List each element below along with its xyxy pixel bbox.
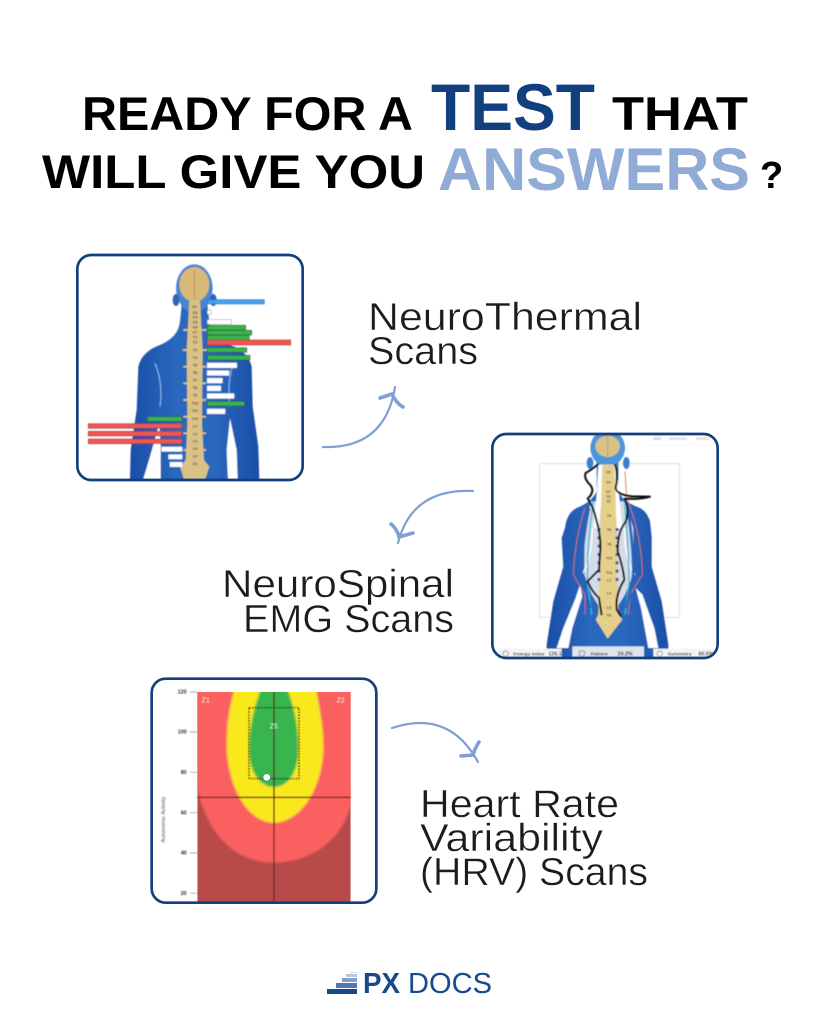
vertebra labels: T9	[193, 394, 197, 398]
vertebra labels: S1	[607, 613, 611, 617]
vertebra labels: L3	[607, 592, 611, 596]
vertebra labels: C7	[193, 330, 197, 334]
legend: Severe	[696, 436, 710, 441]
vertebra labels: T6	[607, 528, 611, 532]
HRV label: (HRV) Scans	[420, 851, 648, 894]
y axis: 120	[178, 690, 187, 696]
vertebra labels: T11	[192, 409, 198, 413]
arrow: to NeuroSpinal	[391, 491, 473, 543]
vertebra labels	[606, 471, 612, 617]
stats bar: Energy Index	[513, 651, 545, 657]
target zone	[249, 708, 299, 779]
y axis: Autonomic Activity	[161, 797, 167, 843]
white gaps beside the torso	[557, 585, 582, 648]
logo: DOCS	[408, 968, 492, 1000]
NeuroThermal label	[368, 296, 642, 373]
y axis: 80	[181, 770, 187, 776]
vertebra labels: C7	[606, 490, 611, 494]
vertebra labels: L1	[193, 424, 197, 428]
y axis: 20	[181, 891, 187, 897]
y axis: 40	[181, 851, 187, 857]
title: READY FOR A	[82, 87, 413, 140]
gray muscle zone	[584, 501, 633, 608]
data point	[263, 774, 270, 781]
title: TEST	[431, 70, 595, 144]
vertebra labels: T12	[606, 571, 612, 575]
NeuroSpinal label: NeuroSpinal	[222, 563, 454, 606]
EMG traces	[585, 464, 602, 615]
spine	[596, 465, 622, 639]
vertebra labels: C3	[193, 311, 197, 315]
logo	[327, 968, 492, 1000]
thermal bars right	[207, 300, 291, 414]
vertebra labels: L1	[607, 578, 611, 582]
NeuroThermal label: NeuroThermal	[368, 296, 642, 339]
zone labels: Z1	[202, 698, 210, 705]
title: THAT	[612, 87, 748, 140]
vertebra labels: T7	[193, 378, 197, 382]
skull	[179, 267, 209, 302]
white gaps beside the torso	[143, 423, 161, 480]
vertebra labels: T3	[193, 348, 197, 352]
crosshair	[197, 692, 351, 902]
vertebra labels: S1	[193, 462, 197, 466]
logo: PX	[363, 968, 401, 1000]
panel: NeuroThermal scan image	[77, 255, 303, 481]
vertebra labels: C5	[606, 471, 611, 475]
HRV label: Heart Rate	[420, 783, 619, 826]
y axis: 60	[181, 810, 187, 816]
y axis: 100	[178, 730, 187, 736]
heatmap	[197, 692, 351, 902]
NeuroThermal label: Scans	[368, 330, 478, 373]
vertebra labels: T10	[192, 401, 198, 405]
zone labels: Z5	[270, 724, 278, 731]
title: WILL GIVE YOU	[42, 145, 425, 198]
zone labels: Z2	[337, 698, 345, 705]
chart frame	[539, 464, 679, 617]
zone labels	[202, 698, 345, 731]
vertebra labels: T4	[193, 356, 198, 360]
vertebra labels: T8	[193, 386, 197, 390]
vertebra labels: T6	[193, 371, 197, 375]
vertebra labels: T2	[606, 495, 610, 499]
spine	[180, 300, 209, 480]
vertebra labels: T8	[607, 542, 611, 546]
legend: Mild	[653, 436, 662, 441]
vertebra labels: L5	[193, 455, 197, 459]
stats bar: 24.2%	[618, 651, 633, 657]
title: ANSWERS	[438, 136, 750, 203]
y axis	[161, 690, 197, 897]
stats bar: Pattern	[591, 651, 608, 657]
HRV label	[420, 783, 648, 894]
legend: Moderate	[669, 436, 688, 441]
panel: NeuroSpinal EMG scan image	[492, 430, 718, 660]
arrow: to HRV	[392, 723, 479, 762]
HRV label: Variability	[420, 817, 604, 860]
vertebra labels: T5	[193, 363, 197, 367]
stats bar: Symmetry	[668, 651, 692, 657]
vertebra labels: T2	[193, 340, 197, 344]
vertebra labels: C4	[193, 316, 198, 320]
vertebra labels: L4	[193, 447, 198, 451]
vertebra labels: T10	[606, 556, 612, 560]
vertebra labels: T4	[607, 514, 612, 518]
title: ?	[760, 155, 783, 197]
vertebra labels	[192, 305, 198, 466]
arrow: to NeuroThermal	[323, 387, 403, 447]
logo icon: stairs	[327, 972, 357, 994]
vertebra labels: C6	[193, 326, 197, 330]
body silhouette	[130, 305, 259, 480]
vertebra labels: C5	[193, 321, 197, 325]
legend	[648, 433, 715, 445]
stats bar: 126.1	[548, 651, 562, 657]
vertebra labels: C2	[192, 305, 197, 309]
vertebra labels: T3	[606, 500, 610, 504]
stats bar	[499, 645, 715, 657]
NeuroSpinal label	[222, 563, 454, 641]
panel: HRV scan image	[152, 679, 376, 903]
vertebra labels: L3	[193, 440, 197, 444]
stats bar: 60.5%	[698, 651, 714, 657]
vertebra labels: L5	[607, 606, 611, 610]
vertebra labels: C3	[606, 481, 611, 485]
vertebra labels: T12	[192, 417, 198, 421]
vertebra labels: L2	[193, 432, 197, 436]
vertebra labels: T1	[193, 335, 197, 339]
thermal bars left	[88, 417, 182, 467]
NeuroSpinal label: EMG Scans	[243, 598, 454, 641]
title	[42, 70, 783, 203]
body silhouette	[547, 458, 668, 658]
